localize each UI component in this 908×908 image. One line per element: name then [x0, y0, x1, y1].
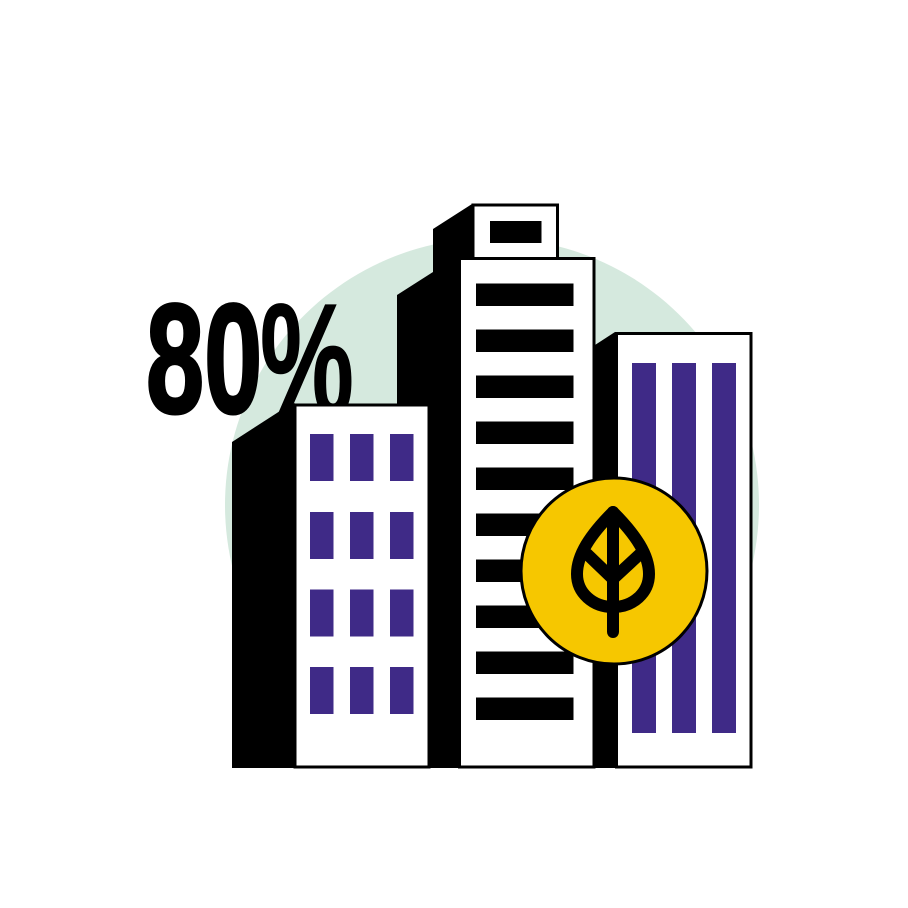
right block window stripes — [632, 363, 736, 733]
badge circle — [521, 478, 707, 664]
left block shadow side — [232, 403, 295, 768]
statistic: 80%: 80 — [146, 273, 262, 447]
building: central tower — [397, 204, 594, 768]
leaf glyph — [577, 512, 649, 632]
left block windows — [310, 434, 414, 714]
tower top penthouse — [473, 205, 558, 259]
building: left block — [232, 403, 429, 768]
statistic: 80% — [146, 270, 354, 449]
right block facade — [616, 334, 751, 767]
background circle — [225, 238, 759, 768]
statistic: 80%: % — [260, 270, 354, 449]
central tower facade — [460, 258, 594, 767]
left block facade — [295, 405, 429, 767]
central tower window bands — [476, 284, 574, 720]
penthouse window — [490, 221, 542, 243]
building: right block — [595, 332, 751, 768]
icon: leaf badge — [521, 478, 707, 664]
right block shadow side — [595, 332, 618, 768]
central tower shadow side — [397, 204, 472, 768]
